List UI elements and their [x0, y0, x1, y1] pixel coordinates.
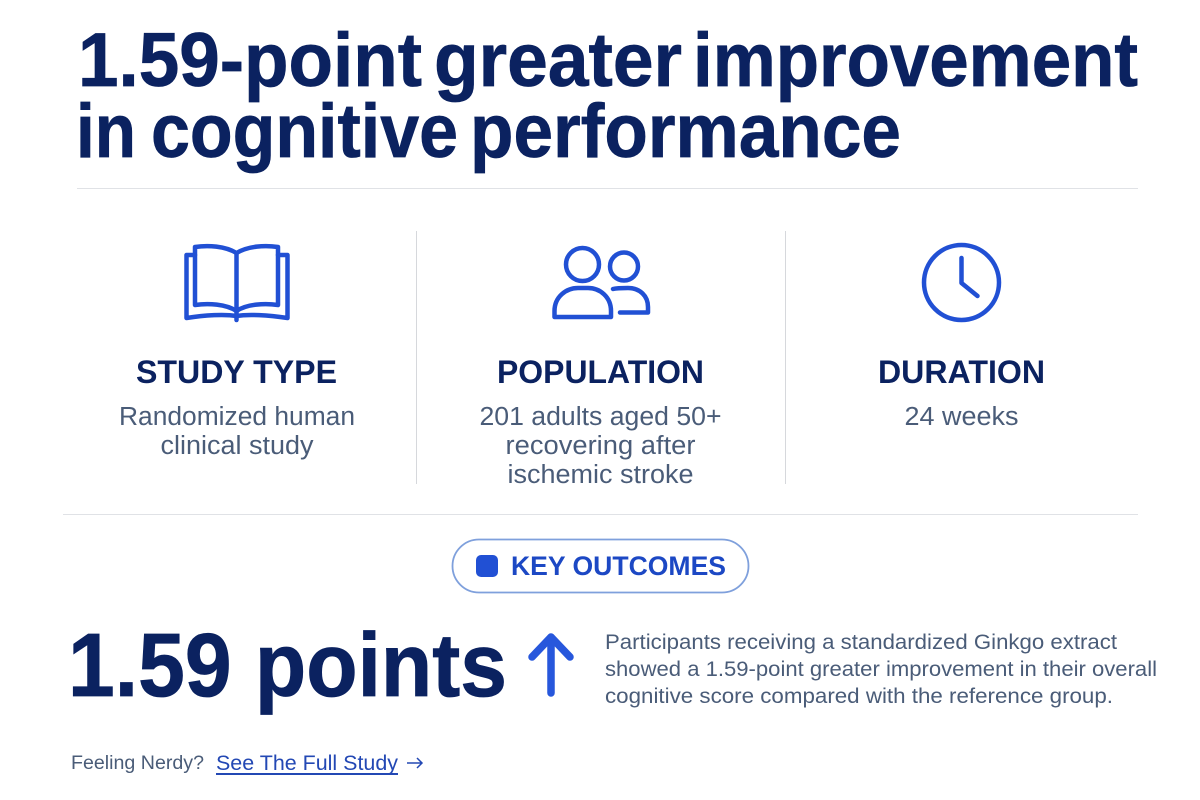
big stat: 1.59 points: 1.59 points — [68, 616, 507, 716]
text: outcome description — [605, 631, 1157, 708]
panel: population — [480, 248, 722, 489]
text: study type detail: clinical study — [160, 432, 314, 460]
heading: study type: STUDY TYPE — [136, 354, 337, 390]
text: population detail: ischemic stroke — [508, 461, 694, 489]
text: study type detail: Randomized human — [119, 403, 355, 431]
heading: population: POPULATION — [497, 354, 704, 390]
footer link line: Feeling Nerdy? — [71, 752, 204, 774]
text: population detail — [480, 403, 722, 489]
panel: study type — [119, 246, 355, 460]
title: greater — [434, 18, 682, 103]
footer link line — [71, 751, 422, 775]
arrow: up — [532, 637, 570, 693]
icon: clock — [924, 245, 999, 320]
icon: open book — [186, 246, 288, 320]
title: improvement — [693, 18, 1138, 103]
label: key outcomes: KEY OUTCOMES — [511, 551, 726, 581]
title: performance — [470, 89, 901, 174]
icon: two people — [554, 248, 648, 317]
title: in — [76, 89, 136, 174]
panel: duration — [878, 245, 1045, 431]
text: outcome description: Participants receiving a standardized Ginkgo extract — [605, 631, 1117, 654]
text: population detail: recovering after — [506, 432, 696, 460]
title: cognitive — [151, 89, 458, 174]
icon: square bullet — [476, 555, 498, 577]
text: outcome description: cognitive score compared with the reference group. — [605, 685, 1113, 708]
heading: duration: DURATION — [878, 354, 1045, 390]
footer link line: See The Full Study — [216, 751, 398, 775]
text: study type detail — [119, 403, 355, 460]
badge: key outcomes — [452, 540, 748, 592]
title — [76, 18, 1138, 174]
text: population detail: 201 adults aged 50+ — [480, 403, 722, 431]
text: duration detail: 24 weeks — [904, 403, 1018, 431]
title: 1.59-point — [78, 18, 422, 103]
text: outcome description: showed a 1.59-point greater improvement in their overall — [605, 658, 1157, 681]
